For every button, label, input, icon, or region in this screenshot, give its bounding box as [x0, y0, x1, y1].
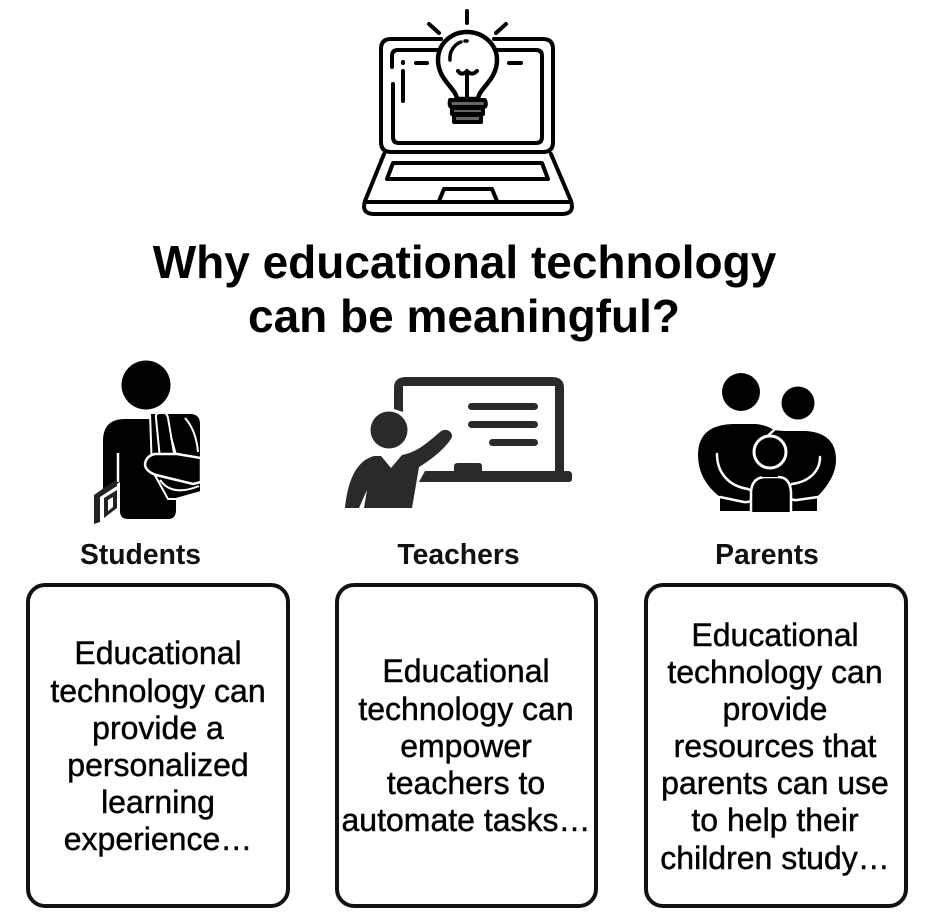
card text: students: technology can	[50, 673, 266, 709]
card text: parents	[660, 617, 890, 876]
card text: parents: children study…	[660, 840, 890, 876]
label: Students: Students	[80, 538, 201, 570]
card text: teachers: Educational	[382, 653, 550, 689]
card text: students: provide a	[92, 710, 224, 746]
label: Teachers: Teachers	[397, 538, 520, 570]
card text: teachers	[342, 653, 590, 838]
card text: students	[50, 635, 266, 857]
icon: laptop with light bulb	[364, 11, 572, 214]
label: Parents: Parents	[715, 538, 819, 570]
icon: student with backpack	[94, 360, 201, 524]
card text: teachers: empower	[400, 728, 532, 764]
panel: teachers card	[337, 585, 596, 906]
icon: light bulb	[438, 32, 497, 122]
title	[153, 236, 777, 342]
title: Why educational technology	[153, 236, 777, 288]
card text: students: learning	[101, 784, 215, 820]
card text: teachers: automate tasks…	[342, 802, 590, 838]
panel: parents card	[646, 585, 906, 906]
icon: family of three	[698, 373, 836, 512]
card text: parents: technology can	[667, 654, 883, 690]
card text: teachers: technology can	[358, 691, 574, 727]
title: can be meaningful?	[248, 290, 680, 342]
panel: students card	[28, 585, 288, 906]
card text: parents: resources that	[674, 728, 876, 764]
card text: parents: Educational	[691, 617, 859, 653]
card text: parents: parents can use	[661, 765, 889, 801]
card text: teachers: teachers to	[387, 765, 545, 801]
card text: parents: provide	[723, 691, 827, 727]
card text: students: personalized	[67, 747, 249, 783]
card text: students: experience…	[64, 821, 252, 857]
icon: teacher at board	[345, 377, 572, 508]
card text: parents: to help their	[691, 802, 859, 838]
card text: students: Educational	[74, 635, 242, 671]
